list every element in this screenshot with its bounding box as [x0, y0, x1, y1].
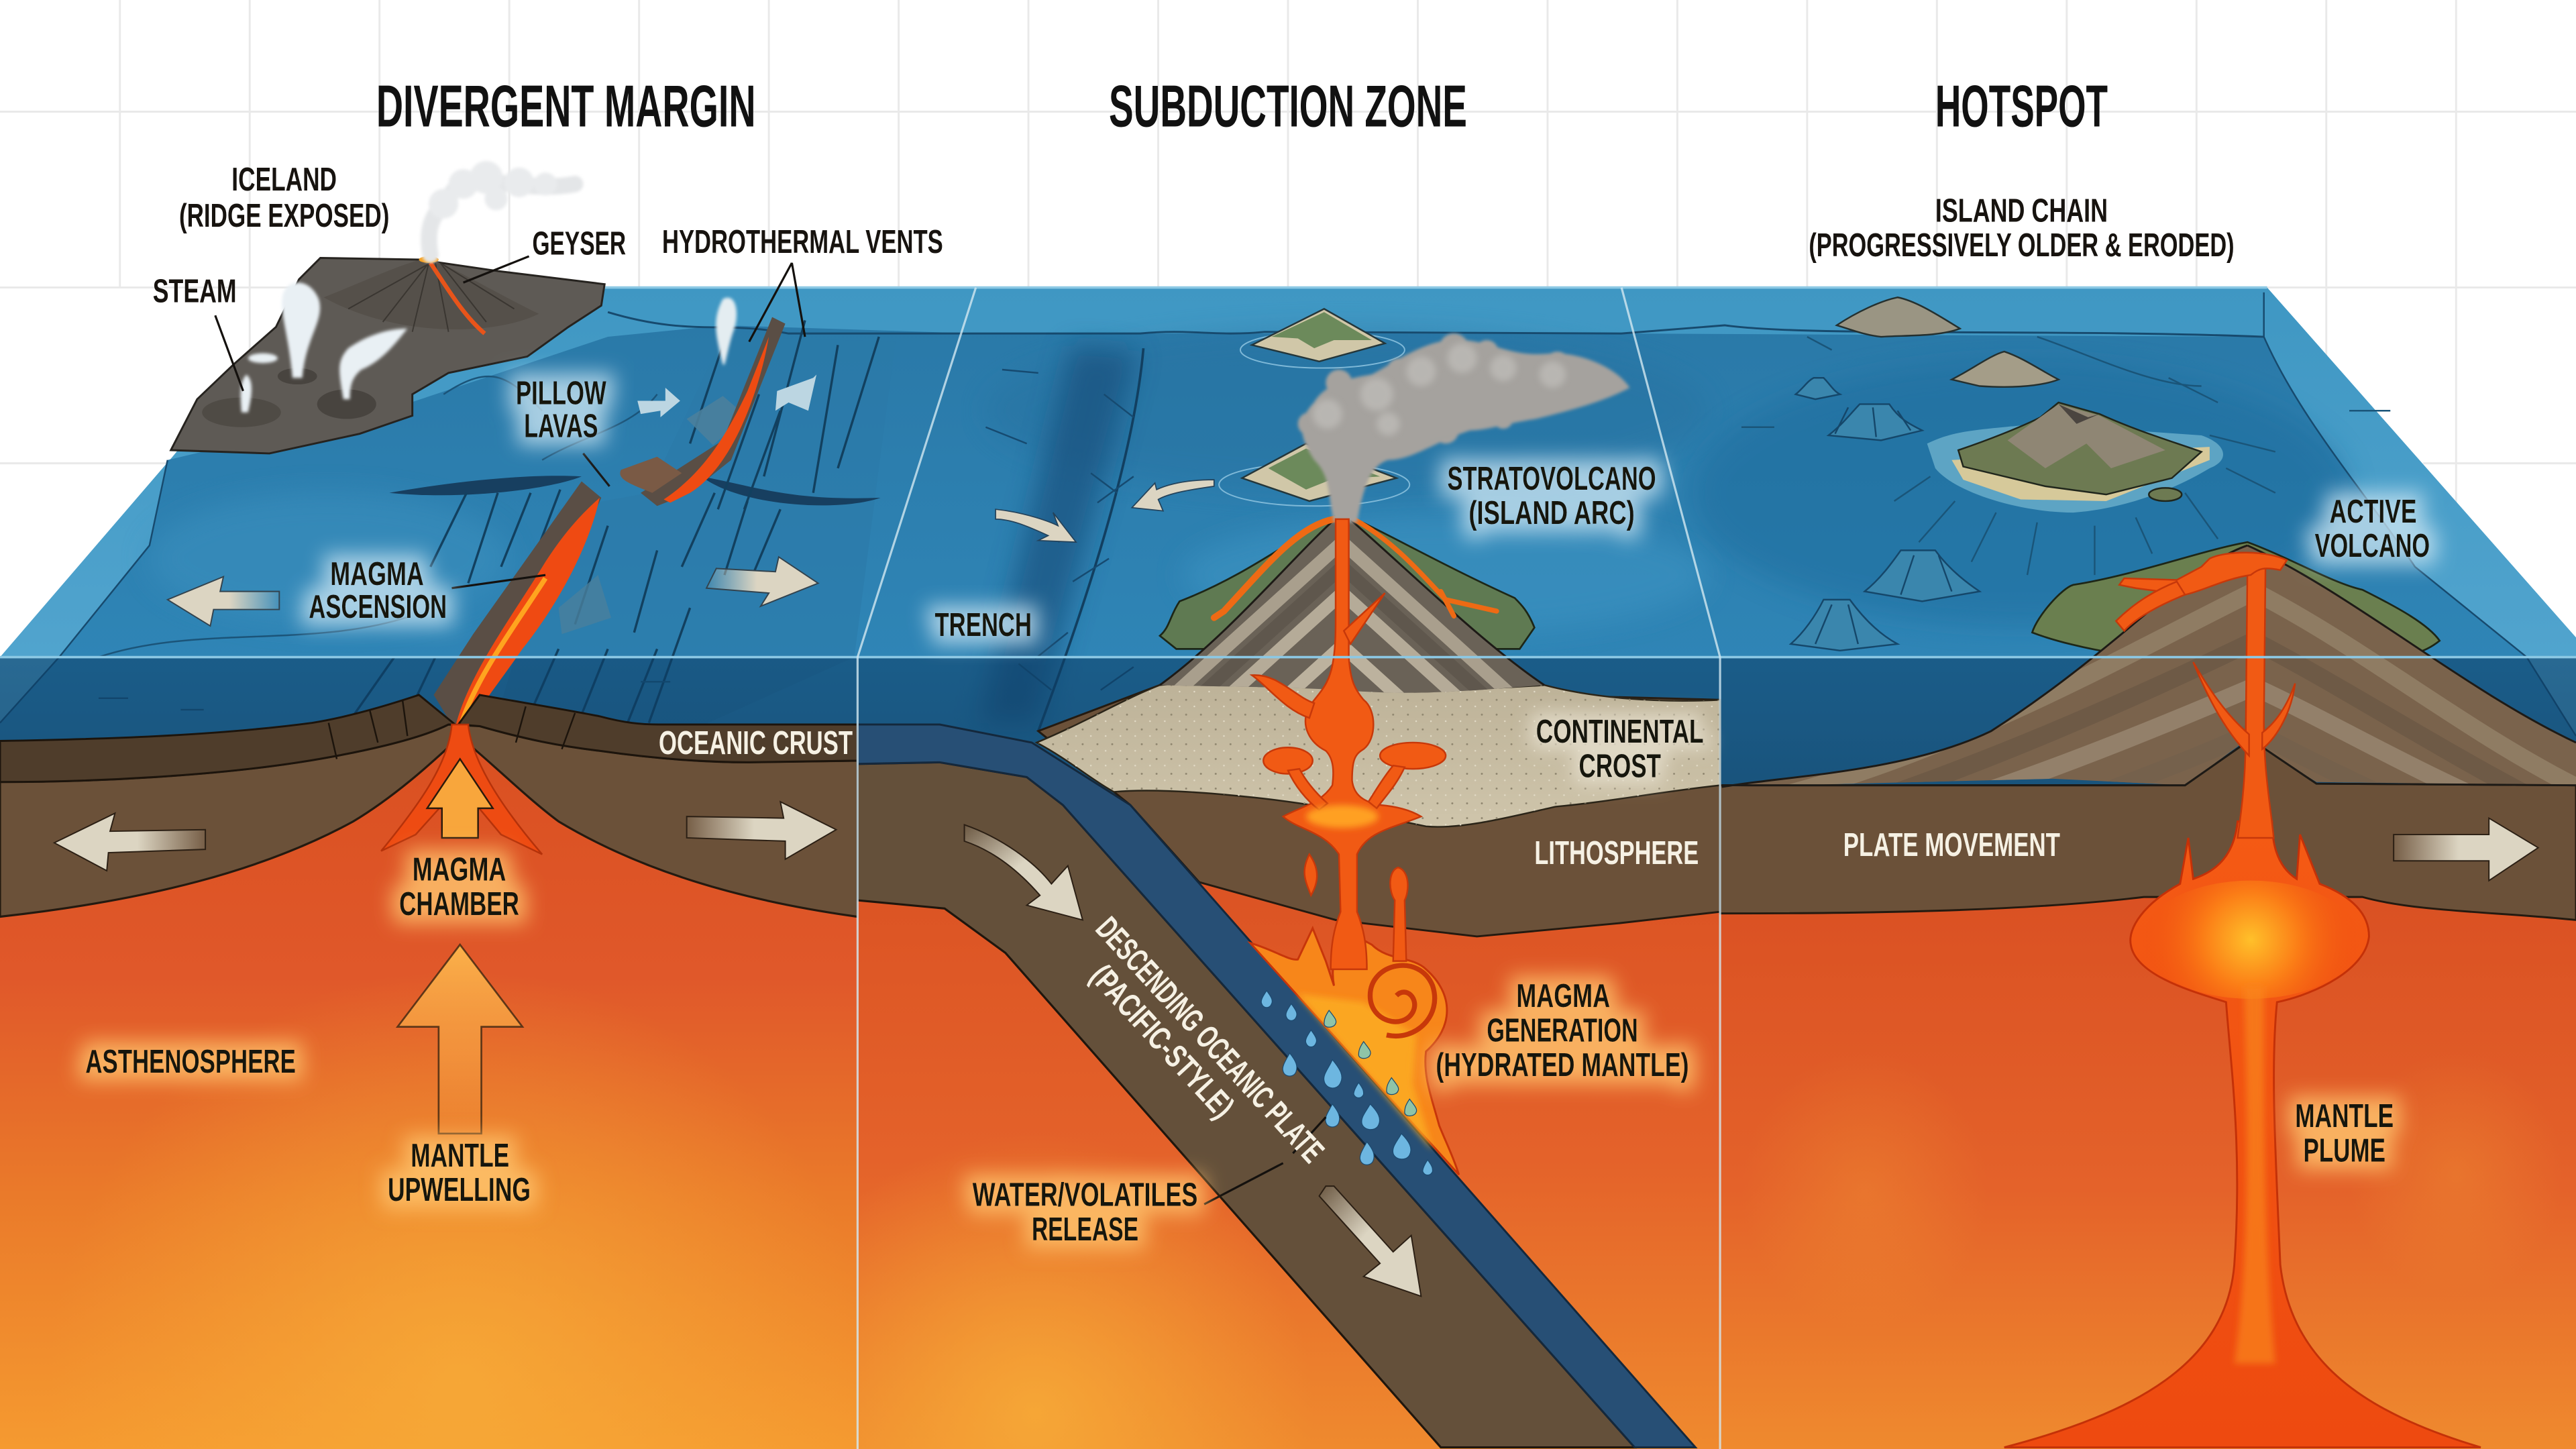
icon: volcanic ash plume — [1298, 333, 1629, 523]
label: steam: STEAM — [153, 274, 237, 310]
mantle section 2 — [857, 805, 1722, 1449]
label: island chain: (PROGRESSIVELY OLDER & ERODED) — [1809, 227, 2235, 264]
label: mantle plume — [2295, 1098, 2394, 1169]
label: magma chamber: CHAMBER — [399, 886, 519, 922]
label: plate movement: PLATE MOVEMENT — [1843, 827, 2060, 863]
blue oceanic slab — [857, 724, 1695, 1448]
label: magma generation: MAGMA — [1516, 978, 1610, 1014]
label: island chain — [1809, 193, 2235, 264]
label: mantle upwelling — [388, 1138, 531, 1208]
label: active volcano: ACTIVE — [2330, 494, 2416, 530]
arrow: surface arrows near ridge — [637, 374, 816, 417]
leader lines — [215, 256, 1326, 1204]
label: stratovolcano: STRATOVOLCANO — [1448, 461, 1656, 497]
label: island chain: ISLAND CHAIN — [1935, 193, 2108, 229]
mantle section 3 — [1720, 871, 2576, 1449]
lithosphere right — [1038, 685, 1720, 936]
icon: mantle plume — [2004, 821, 2481, 1448]
title: divergent margin: DIVERGENT MARGIN — [376, 73, 756, 140]
label: oceanic crust: OCEANIC CRUST — [659, 725, 853, 761]
icon: hotspot active volcano — [1721, 541, 2576, 788]
icon: subduction magma core — [1306, 805, 1379, 828]
arrow: magma chamber up — [427, 759, 493, 838]
panel: front water face — [0, 657, 2576, 805]
arrow: surface spreading right — [706, 557, 818, 606]
label: water volatiles release: RELEASE — [1032, 1212, 1138, 1248]
label: mantle upwelling: UPWELLING — [388, 1172, 531, 1208]
label: Iceland — [179, 162, 389, 234]
label: descending oceanic plate: (PACIFIC-STYLE) — [1083, 958, 1241, 1125]
label: continental crust: CROST — [1578, 748, 1661, 784]
icon: main island — [1927, 402, 2223, 513]
label: trench: TRENCH — [934, 607, 1032, 643]
label: pillow lavas — [516, 375, 606, 444]
arrow: lithosphere left — [54, 813, 205, 871]
icon: stratovolcano — [1158, 515, 1545, 693]
label: magma generation — [1436, 978, 1689, 1083]
label: descending oceanic plate — [1062, 910, 1331, 1194]
label: magma ascension: ASCENSION — [309, 589, 447, 625]
icon: vent plume — [716, 298, 737, 365]
icon: oldest island — [1837, 297, 1960, 337]
title: hotspot: HOTSPOT — [1935, 73, 2108, 140]
label: mantle plume: PLUME — [2303, 1132, 2385, 1169]
sand texture — [1036, 683, 1720, 827]
label: mantle upwelling: MANTLE — [411, 1138, 509, 1174]
arrow: lithosphere right — [687, 802, 837, 859]
lithosphere — [0, 724, 857, 917]
label: magma chamber — [399, 852, 519, 922]
label: water volatiles release: WATER/VOLATILES — [973, 1177, 1197, 1214]
icon: mid-ocean rift with lava — [434, 317, 786, 728]
label: magma ascension: MAGMA — [330, 556, 424, 592]
panel: section 2 subduction zone — [857, 683, 1722, 1449]
label: pillow lavas: PILLOW — [516, 375, 606, 411]
icon: seamounts — [1790, 378, 1980, 651]
arrow: surface spreading left — [168, 577, 279, 626]
label: water volatiles release — [973, 1177, 1197, 1248]
label: continental crust — [1536, 714, 1704, 784]
icon: magma chamber under ridge — [381, 724, 542, 854]
arrow: plate movement — [2394, 818, 2538, 881]
continental crust — [1036, 683, 1720, 827]
panel: section 3 hotspot — [1720, 739, 2576, 1449]
panel: section 2 islands — [1219, 309, 1409, 506]
panel: ocean top surface — [0, 288, 2576, 805]
panel: trench depression on surface — [979, 345, 1143, 731]
icon: ripple lines — [1741, 337, 2390, 575]
arrow: plate descent upper — [965, 824, 1083, 920]
label: magma generation: GENERATION — [1487, 1013, 1638, 1049]
arrow: plate descent lower — [1320, 1186, 1421, 1296]
label: geyser: GEYSER — [532, 226, 626, 262]
descending plate — [857, 762, 1635, 1448]
lithosphere — [1720, 739, 2576, 920]
label: magma ascension — [309, 556, 447, 625]
oceanic crust right — [458, 695, 857, 762]
label: continental crust: CONTINENTAL — [1536, 714, 1704, 750]
label: active volcano: VOLCANO — [2315, 528, 2430, 564]
icon: submerged ridge faults — [99, 321, 896, 731]
arrow: trench approach — [996, 509, 1076, 542]
mantle section 1 — [0, 743, 857, 1449]
label: descending oceanic plate: DESCENDING OCEANIC PLATE — [1089, 910, 1331, 1170]
label: active volcano — [2315, 494, 2430, 564]
label: hydrothermal vents: HYDROTHERMAL VENTS — [662, 224, 943, 260]
panel: hotspot island chain — [1741, 297, 2390, 651]
title: subduction zone: SUBDUCTION ZONE — [1109, 73, 1467, 140]
label: magma chamber: MAGMA — [413, 852, 506, 888]
oceanic crust left — [0, 695, 455, 782]
panel seams — [0, 657, 2576, 658]
icon: hotspot conduit and lava — [2116, 553, 2295, 838]
label: stratovolcano — [1448, 461, 1656, 531]
label: lithosphere: LITHOSPHERE — [1534, 835, 1699, 871]
label: asthenosphere: ASTHENOSPHERE — [85, 1044, 296, 1080]
label: Iceland: ICELAND — [231, 162, 337, 198]
label: stratovolcano: (ISLAND ARC) — [1468, 495, 1635, 531]
icon: water droplets — [1261, 991, 1433, 1175]
arrow: mantle upwelling — [398, 945, 523, 1134]
label: mantle plume: MANTLE — [2295, 1098, 2394, 1134]
icon: subduction magma conduit — [1252, 519, 1446, 969]
icon: volcano smoke and geysers — [241, 161, 575, 413]
section dividers — [857, 288, 1720, 1449]
label: magma generation: (HYDRATED MANTLE) — [1436, 1047, 1689, 1083]
label: Iceland: (RIDGE EXPOSED) — [179, 198, 389, 234]
panel: Iceland ridge exposed — [171, 256, 604, 453]
icon: hydrated mantle wedge — [1250, 928, 1459, 1175]
panel: section 1 crust and lithosphere — [0, 695, 857, 1449]
label: pillow lavas: LAVAS — [524, 408, 598, 444]
icon: eroded island — [1951, 352, 2059, 387]
arrow: island arc motion — [1132, 480, 1214, 511]
